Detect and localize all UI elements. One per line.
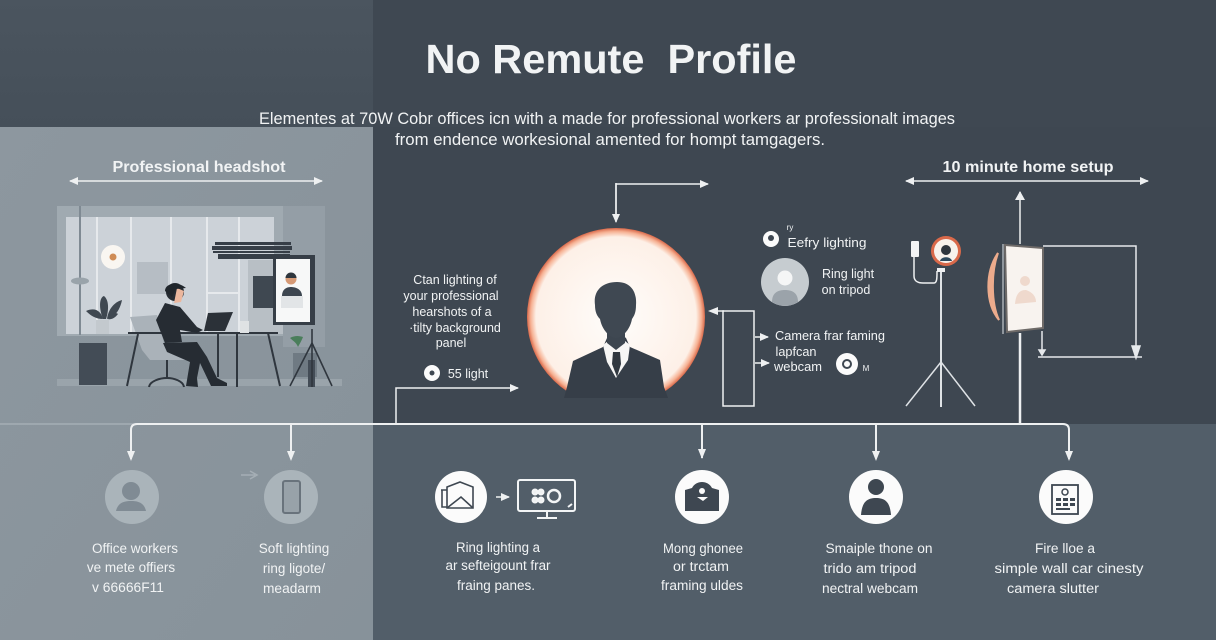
column: office workers: Office workers — [92, 541, 178, 556]
icon: monitor webcam — [518, 480, 575, 518]
office scene illustration — [57, 206, 342, 387]
plant — [86, 296, 122, 319]
column: simple wall: simple wall car cinesty — [994, 561, 1144, 576]
icon: control card — [1039, 470, 1093, 524]
subtitle: Elementes at 70W Cobr offices icn with a made for professional workers ar professionalt images — [259, 110, 955, 128]
column: ring lighting: Ring lighting a — [456, 540, 540, 555]
column: ring lighting: fraing panes. — [457, 578, 535, 593]
label: every lighting: ry — [787, 223, 793, 232]
silhouette — [564, 282, 668, 398]
ring light on tripod — [906, 236, 975, 407]
icon: dark badge — [675, 470, 729, 524]
label: camera framing: lapfcan — [776, 345, 817, 359]
heading: professional headshot: Professional headshot — [112, 159, 286, 176]
portrait screen — [273, 255, 315, 325]
text: clean lighting: hearshots of a — [412, 305, 492, 319]
icon: envelope — [435, 471, 487, 523]
text: clean lighting: panel — [436, 336, 466, 350]
bracket arrows — [708, 307, 769, 406]
panel: professional headshot — [57, 159, 342, 387]
column: smaple phone: Smaiple thone on — [826, 541, 932, 556]
badge: 55 light — [424, 365, 489, 381]
panel: central portrait — [396, 183, 885, 424]
column: mong phone: framing uldes — [661, 578, 743, 593]
icon: phone — [264, 470, 318, 524]
column: simple wall: camera slutter — [1007, 581, 1100, 596]
column: smaple phone — [822, 470, 932, 596]
arrow: headshot width — [70, 180, 322, 182]
label: camera framing — [773, 329, 885, 375]
title: No Remute Profile — [426, 36, 796, 82]
column: mong phone: Mong ghonee — [663, 541, 743, 556]
text: clean lighting: ·tilty background — [409, 321, 501, 335]
heading: home setup: 10 minute home setup — [942, 159, 1114, 176]
ring light avatar — [761, 258, 809, 306]
subtitle: from endence workesional amented for hompt tamgagers. — [395, 131, 825, 149]
column: simple wall: Fire lloe a — [1035, 541, 1095, 556]
label: every lighting — [763, 223, 867, 250]
column: ring lighting — [435, 471, 575, 593]
tripod and small plant — [293, 353, 317, 377]
label: every lighting: Eefry lighting — [788, 236, 867, 250]
column: soft lighting: ring ligote/ — [263, 561, 325, 576]
laptop — [204, 312, 233, 331]
column: simple wall — [994, 470, 1144, 596]
text: clean lighting: your professional — [403, 289, 499, 303]
column: mong phone — [661, 470, 743, 593]
arrow heads — [127, 449, 1073, 461]
icon: person dark — [849, 470, 903, 524]
label: ring light on tripod — [822, 267, 875, 297]
chair — [130, 315, 197, 360]
dimension lines — [1038, 246, 1142, 358]
blinds — [212, 242, 292, 259]
connector lines — [0, 333, 1069, 459]
label: camera framing: Camera frar faming — [775, 329, 885, 343]
cabinet — [79, 343, 107, 385]
column: mong phone: or trctam — [673, 559, 729, 574]
column: office workers — [87, 470, 178, 595]
desk — [127, 333, 280, 387]
label: camera framing: M — [863, 364, 870, 373]
column: smaple phone: trido am tripod — [824, 561, 916, 576]
column: smaple phone: nectral webcam — [822, 581, 918, 596]
label: ring light on tripod: on tripod — [822, 283, 870, 297]
column: ring lighting: ar sefteigount frar — [446, 558, 551, 573]
arrow: up from panel — [1019, 192, 1021, 244]
icon: person — [105, 470, 159, 524]
halo circle — [527, 228, 705, 406]
arrow: setup width — [906, 180, 1148, 182]
panel: 10 minute home setup — [906, 159, 1148, 407]
column: office workers: v 66666F11 — [92, 580, 164, 595]
label: camera framing: webcam — [773, 360, 822, 374]
softbox panel — [988, 244, 1043, 334]
column: soft lighting — [241, 470, 329, 596]
column: soft lighting: meadarm — [263, 581, 321, 596]
arrow: left elbow — [396, 388, 518, 424]
column: office workers: ve mete offiers — [87, 560, 175, 575]
column: soft lighting: Soft lighting — [259, 541, 329, 556]
subtitle — [259, 110, 955, 149]
badge: 55 light: 55 light — [448, 367, 489, 381]
text: clean lighting — [403, 273, 501, 350]
worker — [156, 283, 227, 387]
label: ring light on tripod: Ring light — [822, 267, 875, 281]
arrow: top elbow — [616, 184, 708, 221]
text: clean lighting: Ctan lighting of — [413, 273, 497, 287]
arrow — [496, 496, 509, 498]
